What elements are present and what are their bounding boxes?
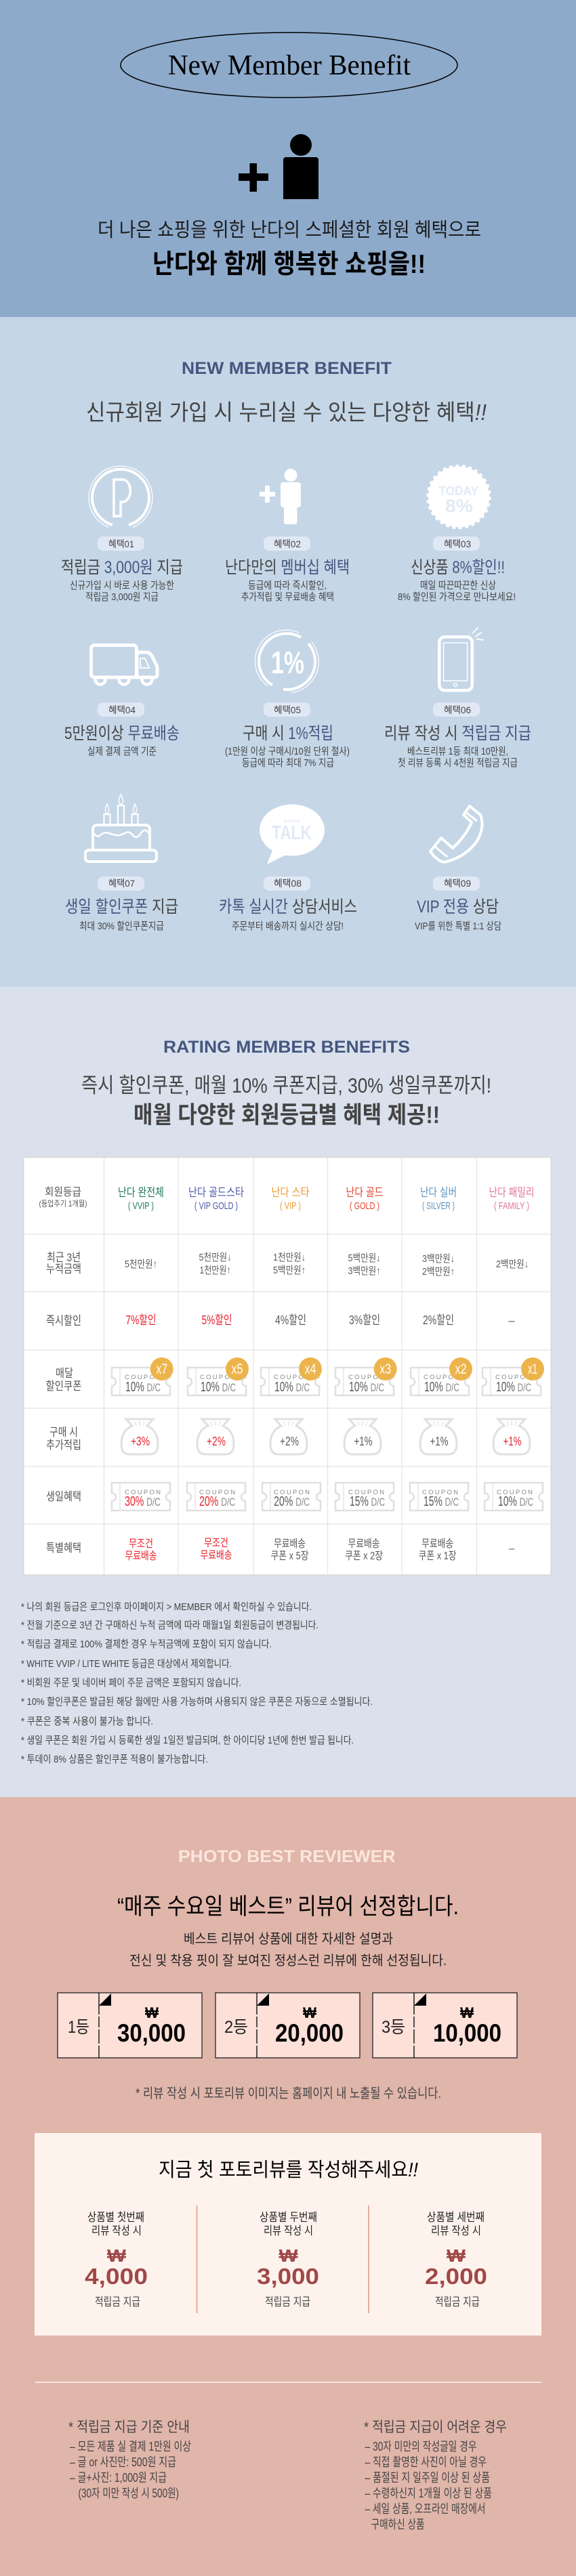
bag +2 bbox=[197, 1419, 234, 1454]
benefit title: 난다만의 멤버십 혜택 bbox=[225, 558, 350, 577]
table row: instant discount: – bbox=[508, 1314, 515, 1327]
excluded cases notes: – 수령하신지 1개월 이상 된 상품 bbox=[365, 2487, 492, 2500]
benefit description bbox=[398, 746, 518, 769]
table row: special benefits: 무료배송 bbox=[421, 1538, 453, 1550]
coupon x4: COUPON bbox=[274, 1374, 310, 1381]
footnotes: * WHITE VVIP / LITE WHITE 등급은 대상에서 제외합니다. bbox=[21, 1658, 232, 1670]
table row: cumulative amount: 5백만원↑ bbox=[273, 1265, 306, 1276]
label: 혜택07 bbox=[108, 878, 135, 889]
table row: instant discount: 5%할인 bbox=[202, 1313, 232, 1327]
bag +1: +1% bbox=[503, 1435, 522, 1448]
excluded cases notes: – 직접 촬영한 사진이 아닐 경우 bbox=[365, 2455, 487, 2469]
icon: today 8 percent badge bbox=[428, 466, 490, 528]
prize ticket 2nd: ₩ bbox=[303, 2004, 316, 2021]
benefit 02 bbox=[225, 469, 350, 603]
coupon x1: x1 bbox=[528, 1361, 537, 1377]
benefit description bbox=[225, 746, 350, 769]
reward 4000: 4,000 bbox=[85, 2264, 148, 2289]
icon: kakao talk bubble: TALK bbox=[272, 822, 312, 844]
section headline: 매월 다양한 회원등급별 혜택 제공!! bbox=[133, 1102, 440, 1128]
table row: cumulative amount: 최근 3년 bbox=[47, 1251, 81, 1264]
label bbox=[433, 877, 480, 891]
reward 2000 bbox=[425, 2211, 487, 2308]
footnotes: * 쿠폰은 중복 사용이 불가능 합니다. bbox=[21, 1716, 153, 1727]
reward 4000 bbox=[85, 2211, 148, 2308]
bag +1: +1% bbox=[430, 1435, 449, 1448]
table row: special benefits: 쿠폰 x 2장 bbox=[345, 1550, 383, 1562]
reward 3000: 상품별 두번째 bbox=[260, 2211, 317, 2224]
coupon x7: x7 bbox=[156, 1361, 167, 1377]
benefit description: 매일 따끈따끈한 신상 bbox=[420, 580, 496, 591]
hero intro text: 더 나은 쇼핑을 위한 난다의 스페셜한 회원 혜택으로 bbox=[98, 219, 481, 241]
table row: grade header bbox=[39, 1186, 534, 1212]
reward 2000: 2,000 bbox=[425, 2264, 487, 2289]
table row: cumulative amount: 1천만원↓ bbox=[273, 1252, 306, 1263]
table row: birthday coupons: 생일혜택 bbox=[46, 1490, 81, 1503]
section label: PHOTO BEST REVIEWER bbox=[178, 1847, 396, 1866]
panel: first photo review rewards bbox=[35, 2133, 541, 2336]
coupon 20: COUPON bbox=[199, 1489, 235, 1496]
coupon x2: 10% D/C bbox=[424, 1380, 459, 1395]
coupon 15 bbox=[335, 1483, 394, 1511]
coupon x1: COUPON bbox=[495, 1374, 531, 1381]
hero headline: 난다와 함께 행복한 쇼핑을!! bbox=[152, 250, 426, 279]
bag +1: +1% bbox=[354, 1435, 373, 1448]
table row: grade header: ( VIP GOLD ) bbox=[194, 1200, 238, 1212]
reward 4000: 적립금 지급 bbox=[95, 2296, 140, 2308]
title badge bbox=[121, 33, 457, 98]
panel: hero bbox=[0, 0, 576, 317]
prize ticket 3rd bbox=[373, 1993, 517, 2058]
section label: RATING MEMBER BENEFITS bbox=[163, 1038, 410, 1057]
table row: extra points on purchase bbox=[46, 1419, 530, 1454]
label bbox=[264, 702, 310, 717]
label: 혜택05 bbox=[274, 704, 301, 715]
section headline: “매주 수요일 베스트” 리뷰어 선정합니다. bbox=[117, 1894, 459, 1920]
benefit description: 신규가입 시 바로 사용 가능한 bbox=[70, 580, 174, 591]
table row: special benefits: 무료배송 bbox=[125, 1550, 157, 1562]
reward criteria notes: – 글 or 사진만: 500원 지급 bbox=[70, 2455, 176, 2469]
benefit 03 bbox=[398, 466, 516, 603]
reward 3000: 적립금 지급 bbox=[265, 2296, 310, 2308]
reward 4000: ₩ bbox=[107, 2245, 127, 2266]
icon: plus person bbox=[239, 134, 318, 199]
footnotes: * 비회원 주문 및 네이버 페이 주문 금액은 포함되지 않습니다. bbox=[21, 1677, 241, 1689]
table row: instant discount: 2%할인 bbox=[423, 1313, 454, 1327]
table row: grade header: 난다 스타 bbox=[271, 1186, 310, 1199]
table row: instant discount bbox=[46, 1313, 515, 1328]
icon: point coin bbox=[89, 466, 152, 527]
benefit description: (1만원 이상 구매시/10원 단위 절사) bbox=[225, 746, 350, 757]
benefit 04 bbox=[64, 645, 180, 757]
benefit description: 첫 리뷰 등록 시 4천원 적립금 지급 bbox=[398, 757, 518, 769]
coupon 30: COUPON bbox=[125, 1489, 161, 1496]
coupon 10: COUPON bbox=[497, 1489, 533, 1496]
bag +3: +3% bbox=[131, 1435, 150, 1448]
table row: monthly discount coupons: 할인쿠폰 bbox=[46, 1380, 81, 1393]
coupon 20: 20% D/C bbox=[274, 1494, 310, 1509]
benefit title: VIP 전용 상담 bbox=[417, 898, 499, 916]
prize ticket 1st bbox=[58, 1993, 202, 2058]
icon: plus person white bbox=[260, 469, 301, 524]
bag +2 bbox=[270, 1419, 307, 1454]
bag +1 bbox=[493, 1419, 530, 1454]
label bbox=[98, 702, 144, 717]
table row: special benefits: 쿠폰 x 1장 bbox=[419, 1550, 457, 1562]
label: 혜택04 bbox=[108, 704, 136, 715]
prize ticket 2nd: 2등 bbox=[224, 2018, 248, 2037]
table row: extra points on purchase: 추가적립 bbox=[46, 1439, 81, 1452]
footnotes bbox=[21, 1601, 373, 1765]
coupon x3: x3 bbox=[379, 1361, 391, 1377]
table row: grade header: 난다 실버 bbox=[420, 1186, 457, 1199]
prize ticket 3rd: 3등 bbox=[382, 2018, 405, 2037]
coupon x5 bbox=[188, 1357, 249, 1395]
label bbox=[433, 536, 480, 551]
benefit description bbox=[241, 580, 334, 603]
icon: smartphone bbox=[439, 627, 484, 690]
benefit description: 실제 결제 금액 기준 bbox=[87, 746, 157, 757]
benefit description: VIP를 위한 특별 1:1 상담 bbox=[415, 921, 501, 932]
table row: instant discount: 4%할인 bbox=[275, 1313, 306, 1327]
benefit description: 추가적립 및 무료배송 혜택 bbox=[241, 591, 334, 603]
coupon 10: 10% D/C bbox=[498, 1494, 533, 1509]
table row: birthday coupons bbox=[46, 1483, 543, 1511]
bag +3 bbox=[121, 1419, 158, 1454]
table row: instant discount: 즉시할인 bbox=[46, 1314, 81, 1328]
table row: cumulative amount: 2백만원↑ bbox=[422, 1266, 455, 1278]
icon: telephone handset bbox=[430, 806, 482, 862]
icon: kakao talk bubble: KAKAO bbox=[284, 820, 300, 824]
benefit title: 적립금 3,000원 지급 bbox=[61, 558, 183, 577]
prize ticket 3rd: 10,000 bbox=[433, 2019, 501, 2047]
icon: truck bbox=[91, 645, 157, 684]
excluded cases notes: – 세일 상품, 오프라인 매장에서 bbox=[365, 2502, 485, 2516]
label bbox=[264, 877, 310, 891]
benefit 07 bbox=[65, 795, 178, 932]
coupon x7: 10% D/C bbox=[125, 1380, 161, 1395]
coupon 20: 20% D/C bbox=[199, 1494, 235, 1509]
prize ticket 2nd bbox=[215, 1993, 360, 2058]
reward 4000: 리뷰 작성 시 bbox=[91, 2224, 142, 2237]
coupon 15: 15% D/C bbox=[424, 1494, 459, 1509]
benefit description: 등급에 따라 최대 7% 지급 bbox=[242, 757, 334, 769]
coupon x7 bbox=[112, 1357, 173, 1395]
coupon x3: COUPON bbox=[348, 1374, 384, 1381]
table row: grade header: ( FAMILY ) bbox=[494, 1200, 529, 1212]
footnotes: * 나의 회원 등급은 로그인후 마이페이지 > MEMBER 에서 확인하실 수 있습니다. bbox=[21, 1601, 312, 1613]
icon: one percent ring bbox=[255, 630, 318, 693]
table row: cumulative amount: 5백만원↓ bbox=[348, 1252, 381, 1264]
coupon x4 bbox=[261, 1357, 322, 1395]
footnotes: * 투데이 8% 상품은 할인쿠폰 적용이 불가능합니다. bbox=[21, 1754, 208, 1765]
panel: photo best reviewer bbox=[0, 1797, 576, 2576]
reward criteria notes: – 글+사진: 1,000원 지급 bbox=[70, 2471, 167, 2485]
footnotes: * 적립금 결제로 100% 결제한 경우 누적금액에 포함이 되지 않습니다. bbox=[21, 1639, 272, 1650]
coupon x3: 10% D/C bbox=[349, 1380, 384, 1395]
label bbox=[98, 536, 144, 551]
section description: 전신 및 착용 핏이 잘 보여진 정성스런 리뷰에 한해 선정됩니다. bbox=[129, 1953, 447, 1968]
section heading line: 즉시 할인쿠폰, 매월 10% 쿠폰지급, 30% 생일쿠폰까지! bbox=[81, 1074, 491, 1097]
section label: NEW MEMBER BENEFIT bbox=[182, 359, 392, 378]
excluded cases notes: 구매하신 상품 bbox=[371, 2518, 425, 2531]
prize ticket 1st: 1등 bbox=[68, 2018, 89, 2037]
table row: monthly discount coupons bbox=[46, 1357, 544, 1395]
coupon 15: 15% D/C bbox=[350, 1494, 385, 1509]
table row: special benefits: 무조건 bbox=[129, 1538, 153, 1550]
label bbox=[98, 877, 144, 891]
table row: cumulative amount bbox=[46, 1251, 529, 1278]
benefit title: 리뷰 작성 시 적립금 지급 bbox=[384, 724, 531, 743]
coupon 20 bbox=[262, 1483, 321, 1511]
reward criteria notes: (30자 미만 작성 시 500원) bbox=[79, 2487, 179, 2500]
table row: cumulative amount: 5천만원↑ bbox=[125, 1259, 157, 1270]
label: 혜택09 bbox=[444, 878, 471, 889]
table row: grade header: 난다 패밀리 bbox=[489, 1186, 534, 1199]
label: 혜택06 bbox=[444, 704, 471, 715]
coupon x4: 10% D/C bbox=[274, 1380, 310, 1395]
panel: new member benefits bbox=[0, 317, 576, 987]
label: 혜택03 bbox=[444, 539, 471, 549]
benefit title: 5만원이상 무료배송 bbox=[64, 724, 180, 743]
table row: special benefits: 특별혜택 bbox=[46, 1542, 81, 1555]
benefit description: 최대 30% 할인쿠폰지급 bbox=[79, 921, 164, 932]
label: 혜택08 bbox=[274, 878, 302, 889]
reward 3000: 3,000 bbox=[257, 2264, 319, 2289]
rating table bbox=[24, 1157, 551, 1575]
table row: special benefits bbox=[46, 1537, 515, 1562]
benefit 01 bbox=[61, 466, 183, 603]
footnotes: * 전월 기준으로 3년 간 구매하신 누적 금액에 따라 매월1일 회원등급이 변경됩니다. bbox=[21, 1620, 318, 1631]
reward 2000: 리뷰 작성 시 bbox=[431, 2224, 481, 2237]
benefit description: 적립금 3,000원 지급 bbox=[85, 591, 159, 603]
coupon x3 bbox=[335, 1357, 397, 1395]
table row: grade header: ( VVIP ) bbox=[128, 1200, 154, 1212]
coupon x1 bbox=[482, 1357, 544, 1395]
icon: today 8 percent badge: TODAY bbox=[439, 484, 478, 498]
reward criteria notes: * 적립금 지급 기준 안내 bbox=[68, 2420, 190, 2435]
table row: special benefits: 무료배송 bbox=[201, 1549, 232, 1561]
table row: special benefits: – bbox=[509, 1543, 515, 1555]
benefit 05 bbox=[225, 630, 350, 769]
section description bbox=[129, 1931, 447, 1968]
coupon 15 bbox=[410, 1483, 468, 1511]
reward 2000: ₩ bbox=[447, 2245, 466, 2266]
table row: grade header: ( VIP ) bbox=[280, 1200, 301, 1212]
benefit description: 베스트리뷰 1등 최대 10만원, bbox=[407, 746, 508, 757]
benefit description: 등급에 따라 즉시할인, bbox=[248, 580, 327, 591]
table row: special benefits: 쿠폰 x 5장 bbox=[271, 1550, 309, 1562]
reward 2000: 적립금 지급 bbox=[435, 2296, 480, 2308]
coupon x2: COUPON bbox=[424, 1374, 459, 1381]
prize ticket 3rd: ₩ bbox=[460, 2004, 474, 2021]
table row: grade header: 난다 완전체 bbox=[118, 1186, 164, 1199]
section description: 베스트 리뷰어 상품에 대한 자세한 설명과 bbox=[184, 1931, 393, 1947]
bag +2: +2% bbox=[207, 1435, 226, 1448]
icon: kakao talk bubble bbox=[260, 805, 325, 864]
prize ticket 1st: ₩ bbox=[145, 2004, 159, 2021]
excluded cases notes bbox=[364, 2420, 507, 2531]
footnotes: * 생일 쿠폰은 회원 가입 시 등록한 생일 1일전 발급되며, 한 아이디당 1년에 한번 발급 됩니다. bbox=[21, 1735, 354, 1746]
table row: special benefits: 무료배송 bbox=[348, 1538, 379, 1550]
footnotes: * 10% 할인쿠폰은 발급된 해당 월에만 사용 가능하며 사용되지 않은 쿠폰은 자동으로 소멸됩니다. bbox=[21, 1696, 373, 1708]
table row: grade header: 난다 골드 bbox=[346, 1186, 384, 1199]
table row: cumulative amount: 2백만원↓ bbox=[496, 1259, 529, 1270]
table row: cumulative amount: 3백만원↓ bbox=[422, 1253, 455, 1265]
prize ticket 2nd: 20,000 bbox=[275, 2019, 344, 2047]
table row: extra points on purchase: 구매 시 bbox=[49, 1426, 78, 1439]
coupon x2 bbox=[411, 1357, 472, 1395]
section heading: 신규회원 가입 시 누리실 수 있는 다양한 혜택!! bbox=[86, 400, 487, 425]
coupon 30 bbox=[112, 1483, 170, 1511]
label bbox=[264, 536, 310, 551]
prize note: * 리뷰 작성 시 포토리뷰 이미지는 홈페이지 내 노출될 수 있습니다. bbox=[136, 2086, 441, 2101]
reward 2000: 상품별 세번째 bbox=[427, 2211, 485, 2224]
coupon x5: COUPON bbox=[200, 1374, 236, 1381]
coupon x5: 10% D/C bbox=[201, 1380, 236, 1395]
coupon x4: x4 bbox=[305, 1361, 316, 1377]
table row: grade header: 회원등급 bbox=[45, 1186, 81, 1198]
reward criteria notes: – 모든 제품 실 결제 1만원 이상 bbox=[70, 2440, 191, 2453]
coupon x5: x5 bbox=[232, 1361, 243, 1377]
benefit 06 bbox=[384, 627, 531, 769]
coupon 20 bbox=[187, 1483, 245, 1511]
table row: grade header: 난다 골드스타 bbox=[188, 1186, 244, 1199]
coupon x7: COUPON bbox=[125, 1374, 161, 1381]
panel: rating member benefits bbox=[0, 987, 576, 1797]
benefit description: 주문부터 배송까지 실시간 상담! bbox=[232, 921, 344, 932]
reward criteria notes bbox=[68, 2420, 191, 2500]
reward 3000 bbox=[257, 2211, 319, 2308]
benefit 08 bbox=[219, 805, 357, 932]
rewards heading: 지금 첫 포토리뷰를 작성해주세요!! bbox=[159, 2159, 418, 2181]
table row: special benefits: 무조건 bbox=[204, 1537, 228, 1549]
coupon x2: x2 bbox=[455, 1361, 466, 1377]
excluded cases notes: * 적립금 지급이 어려운 경우 bbox=[364, 2420, 507, 2435]
table row: cumulative amount: 5천만원↓ bbox=[199, 1252, 232, 1263]
table row: grade header: ( GOLD ) bbox=[350, 1200, 379, 1212]
benefit description bbox=[398, 580, 516, 603]
excluded cases notes: – 품절된 지 일주일 이상 된 상품 bbox=[365, 2471, 490, 2485]
bag +1 bbox=[344, 1419, 381, 1454]
table row: cumulative amount: 3백만원↑ bbox=[348, 1265, 381, 1277]
icon: today 8 percent badge: 8% bbox=[445, 496, 473, 516]
benefit description: 8% 할인된 가격으로 만나보세요! bbox=[398, 591, 516, 603]
coupon 15: COUPON bbox=[422, 1489, 458, 1496]
icon: birthday cake bbox=[85, 795, 157, 862]
coupon x1: 10% D/C bbox=[496, 1380, 531, 1395]
table row: grade header: (등업주기 1개월) bbox=[39, 1199, 87, 1208]
table row: grade header: ( SILVER ) bbox=[422, 1200, 455, 1212]
label: 혜택01 bbox=[108, 539, 134, 549]
table row: cumulative amount: 1천만원↑ bbox=[199, 1265, 230, 1276]
coupon 15: COUPON bbox=[348, 1489, 384, 1496]
benefit description bbox=[70, 580, 174, 603]
reward 3000: 리뷰 작성 시 bbox=[264, 2224, 313, 2237]
benefit title: 카톡 실시간 상담서비스 bbox=[219, 898, 357, 916]
table row: instant discount: 7%할인 bbox=[126, 1313, 156, 1327]
table row: instant discount: 3%할인 bbox=[349, 1313, 380, 1327]
reward 3000: ₩ bbox=[279, 2245, 298, 2266]
benefit title: 구매 시 1%적립 bbox=[243, 724, 333, 743]
title badge: New Member Benefit bbox=[168, 50, 411, 81]
table row: special benefits: 무료배송 bbox=[274, 1538, 306, 1550]
table row: cumulative amount: 누적금액 bbox=[46, 1263, 81, 1275]
icon: one percent ring: 1% bbox=[271, 645, 304, 680]
table row: monthly discount coupons: 매달 bbox=[56, 1367, 73, 1380]
bag +1 bbox=[420, 1419, 457, 1454]
bag +2: +2% bbox=[280, 1435, 299, 1448]
prize ticket 1st: 30,000 bbox=[117, 2019, 186, 2047]
coupon 10 bbox=[485, 1483, 543, 1511]
label bbox=[433, 702, 480, 717]
reward 4000: 상품별 첫번째 bbox=[87, 2211, 144, 2224]
benefit title: 신상품 8%할인!! bbox=[411, 558, 505, 577]
coupon 20: COUPON bbox=[274, 1489, 310, 1496]
benefit title: 생일 할인쿠폰 지급 bbox=[65, 898, 178, 916]
label: 혜택02 bbox=[274, 539, 301, 549]
benefit 09 bbox=[415, 806, 501, 932]
excluded cases notes: – 30자 미만의 작성글일 경우 bbox=[365, 2440, 477, 2453]
coupon 30: 30% D/C bbox=[125, 1494, 161, 1509]
